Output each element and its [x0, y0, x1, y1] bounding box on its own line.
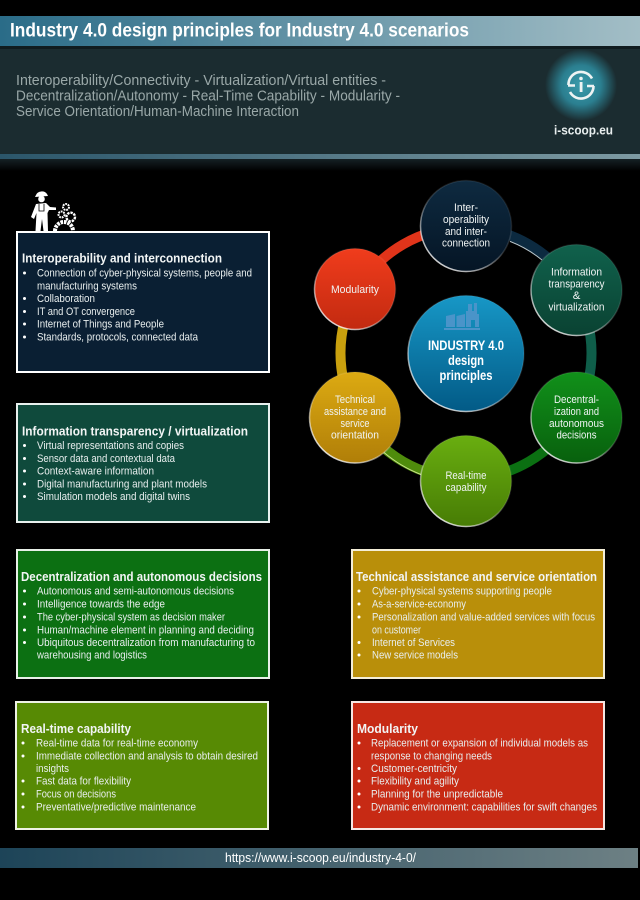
footer bar with url	[0, 848, 638, 868]
panel: real-time capability: Real-time capability	[21, 721, 132, 736]
icon: factory	[444, 303, 480, 330]
panel: interoperability and interconnection: Connection of cyber-physical systems, people and	[37, 268, 252, 280]
node: decentralization: Decentral-	[554, 394, 599, 406]
panel: decentralization and autonomous decisions: Autonomous and semi-autonomous decisions	[37, 586, 234, 598]
panel: decentralization and autonomous decisions: Ubiquitous decentralization from manufacturing to	[37, 637, 255, 649]
node: interoperability: Inter-	[454, 202, 478, 214]
node: information transparency: virtualization	[548, 302, 604, 314]
node: information transparency	[531, 244, 622, 336]
panel: real-time capability: Immediate collection and analysis to obtain desired	[36, 750, 258, 762]
panel: modularity: Replacement or expansion of individual models as	[371, 738, 588, 750]
panel: interoperability and interconnection: Collaboration	[37, 293, 95, 305]
panel: real-time capability: Focus on decisions	[36, 788, 116, 800]
subtitle: Interoperability/Connectivity - Virtualization/Virtual entities -	[16, 73, 386, 89]
title bar	[0, 16, 640, 46]
panel: interoperability and interconnection: Internet of Things and People	[37, 318, 164, 330]
header panel	[0, 46, 640, 171]
node: technical assistance	[310, 372, 400, 463]
panel: technical assistance and service orientation	[352, 550, 604, 678]
panel: technical assistance and service orientation: on customer	[372, 624, 421, 636]
node: decentralization: ization and	[554, 406, 599, 418]
panel: information transparency / virtualization: Digital manufacturing and plant models	[37, 478, 207, 490]
subtitle: Service Orientation/Human-Machine Interaction	[16, 104, 299, 120]
panel: information transparency / virtualization: Information transparency / virtualization	[22, 424, 248, 438]
panel: technical assistance and service orientation: Personalization and value-added services with focus	[372, 612, 595, 624]
worker figure	[31, 191, 56, 231]
node: interoperability: and inter-	[445, 226, 487, 238]
gears	[55, 204, 75, 231]
panel: modularity: Planning for the unpredictable	[371, 788, 503, 800]
panel: modularity: Dynamic environment: capabilities for swift changes	[371, 802, 597, 814]
node: information transparency: transparency	[548, 278, 605, 290]
node: modularity	[314, 248, 396, 330]
node: real-time capability	[420, 436, 512, 526]
panel: decentralization and autonomous decisions: The cyber-physical system as decision maker	[37, 612, 225, 624]
node: technical assistance: orientation	[331, 430, 379, 442]
panel: modularity	[352, 702, 604, 829]
panel: interoperability and interconnection: Interoperability and interconnection	[22, 250, 222, 266]
subtitle	[16, 73, 400, 120]
panel: decentralization and autonomous decisions: Human/machine element in planning and deciding	[37, 624, 254, 636]
center circle: industry 4.0: INDUSTRY 4.0	[428, 338, 504, 353]
panel: interoperability and interconnection: manufacturing systems	[37, 280, 137, 292]
node: modularity: Modularity	[331, 284, 379, 296]
panel: decentralization and autonomous decisions: warehousing and logistics	[36, 650, 147, 662]
node: real-time capability: Real-time	[446, 470, 486, 482]
node: interoperability: connection	[442, 238, 490, 250]
panel: modularity: Flexibility and agility	[371, 776, 459, 788]
footer bar with url: https://www.i-scoop.eu/industry-4-0/	[225, 851, 417, 865]
panel: information transparency / virtualization: Context-aware information	[37, 466, 154, 478]
panel: technical assistance and service orientation: Cyber-physical systems supporting people	[372, 586, 552, 598]
panel: information transparency / virtualization: Simulation models and digital twins	[37, 491, 190, 503]
center circle: industry 4.0: principles	[440, 368, 492, 383]
center circle: industry 4.0: design	[448, 353, 484, 368]
panel: information transparency / virtualization: Virtual representations and copies	[37, 440, 184, 452]
node: decentralization	[531, 372, 622, 463]
panel: technical assistance and service orientation: Technical assistance and service orientation	[356, 569, 597, 584]
panel: decentralization and autonomous decisions: Decentralization and autonomous decisions	[21, 569, 262, 584]
panel: real-time capability: Fast data for flexibility	[36, 776, 131, 788]
logo	[545, 49, 617, 138]
node: information transparency: Information	[551, 266, 602, 278]
cycle ring	[340, 228, 592, 478]
node: interoperability	[420, 180, 512, 272]
node: interoperability: operability	[443, 214, 489, 226]
subtitle: Decentralization/Autonomy - Real-Time Capability - Modularity -	[16, 88, 400, 104]
icon: worker and gears	[31, 191, 75, 231]
panel: technical assistance and service orientation: Internet of Services	[372, 637, 455, 649]
panel: real-time capability: Preventative/predictive maintenance	[36, 802, 196, 814]
panel: decentralization and autonomous decisions	[17, 550, 269, 678]
panel: interoperability and interconnection	[17, 232, 269, 372]
panel: real-time capability	[16, 702, 268, 829]
panel: real-time capability: Real-time data for real-time economy	[36, 738, 198, 750]
logo: i-scoop.eu	[554, 124, 613, 138]
panel: modularity: Customer-centricity	[371, 763, 457, 775]
node: technical assistance: Technical	[335, 394, 375, 406]
node: technical assistance: assistance and	[324, 406, 386, 418]
panel: real-time capability: insights	[36, 763, 69, 775]
panel: decentralization and autonomous decisions: Intelligence towards the edge	[37, 598, 165, 610]
panel: information transparency / virtualization: Sensor data and contextual data	[37, 453, 176, 465]
node: real-time capability: capability	[446, 482, 487, 494]
panel: technical assistance and service orientation: As-a-service-economy	[372, 598, 466, 610]
panel: interoperability and interconnection: Standards, protocols, connected data	[37, 332, 199, 344]
panel: interoperability and interconnection: IT and OT convergence	[37, 306, 135, 318]
node: information transparency: &	[573, 290, 581, 302]
node: technical assistance: service	[340, 418, 370, 430]
node: decentralization: decisions	[556, 430, 597, 442]
panel: technical assistance and service orientation: New service models	[372, 650, 458, 662]
panel: information transparency / virtualization	[17, 404, 269, 522]
panel: modularity: response to changing needs	[371, 750, 492, 762]
center circle: industry 4.0	[408, 296, 524, 412]
title bar: Industry 4.0 design principles for Industry 4.0 scenarios	[10, 20, 469, 42]
node: decentralization: autonomous	[549, 418, 604, 430]
panel: modularity: Modularity	[357, 721, 419, 736]
